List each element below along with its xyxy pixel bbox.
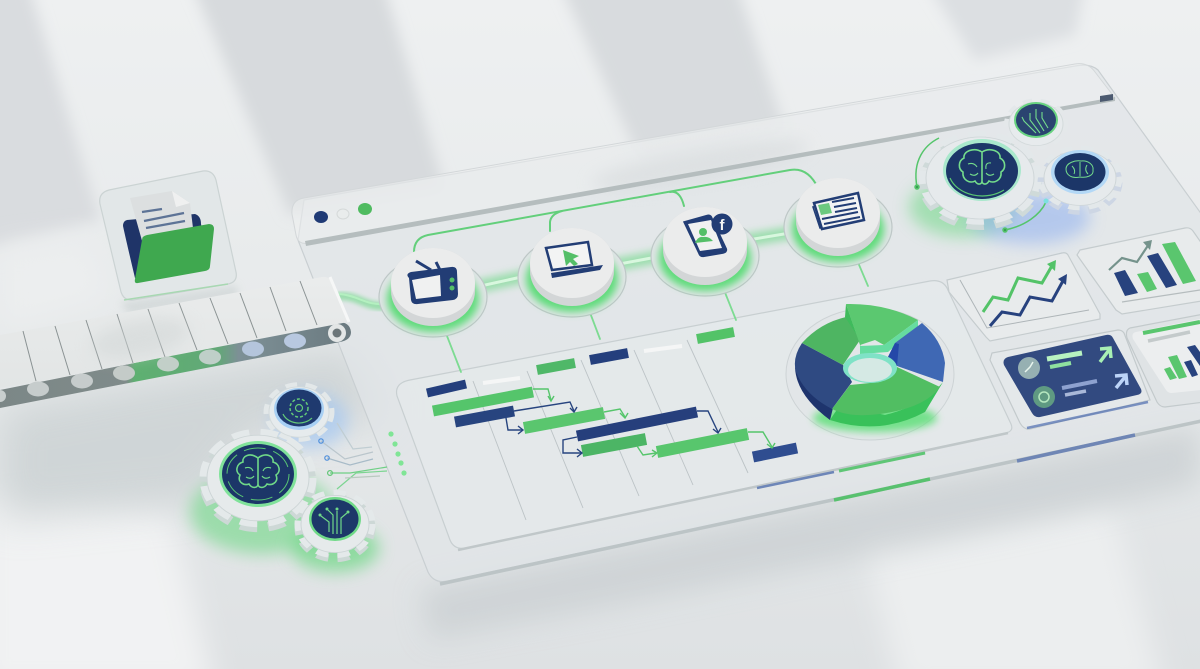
gear: right small	[1042, 149, 1118, 211]
orbit arrows	[915, 138, 1048, 232]
gears: upper right AI cluster	[909, 102, 1118, 244]
pie slice: bottom green	[832, 367, 940, 415]
gear: top small	[268, 386, 330, 438]
node: newspaper channel	[784, 178, 892, 267]
glowing pins	[388, 431, 407, 476]
gantt column lines	[473, 340, 748, 520]
browser title bar	[292, 64, 1115, 246]
window dots	[314, 203, 372, 223]
gear: large brain	[205, 433, 311, 528]
panel: main glass dashboard	[292, 64, 1200, 584]
belt underside	[0, 322, 351, 408]
node: mobile social channel	[651, 207, 759, 296]
icon: phone with social bubble: f	[720, 217, 726, 234]
pie slice: navy	[795, 343, 852, 409]
pie slice: blue	[888, 323, 945, 382]
icon: television	[407, 261, 458, 304]
circuit traces: gears to panel	[319, 423, 407, 489]
icon: open folder	[123, 191, 214, 283]
disc: brain large	[943, 139, 1021, 201]
chart: bars with trend arrow	[1109, 240, 1196, 296]
panel: bar chart card	[1077, 228, 1200, 314]
chart: mini bars	[1164, 345, 1200, 380]
icon: laptop with cursor	[546, 242, 603, 278]
belt rollers	[0, 334, 306, 402]
gear: large brain	[924, 135, 1036, 226]
disc: brain small	[1051, 150, 1109, 194]
panel: mini report card	[1126, 311, 1200, 407]
folder card	[100, 171, 236, 300]
conveyor belt	[0, 277, 351, 408]
disc: circuit	[309, 497, 361, 541]
disc: circuit	[1014, 102, 1058, 138]
panel: dark KPI card	[990, 330, 1150, 429]
chart: gantt timeline	[427, 332, 797, 520]
pie centre hub	[843, 353, 897, 383]
gear: top small	[1008, 102, 1064, 146]
panel rim with coloured reflections	[440, 417, 1200, 584]
gears: lower left AI cluster	[190, 386, 379, 572]
pie slice: green top left	[802, 317, 860, 365]
icon: newspaper	[813, 193, 864, 229]
connector lines: green data paths	[340, 170, 868, 372]
pie slice: raised light green	[845, 304, 918, 354]
panel: gantt and pie glass card	[397, 281, 1012, 550]
KPI contents	[1018, 348, 1127, 408]
gear: bottom small	[299, 494, 371, 558]
gantt bars	[427, 332, 797, 457]
belt pulley	[328, 324, 346, 342]
chart: line trends	[983, 260, 1067, 326]
conveyor and panel cast shadows	[0, 285, 1200, 640]
belt slats	[0, 277, 349, 388]
disc: settings	[274, 388, 324, 430]
disc: brain large	[219, 441, 297, 507]
gantt dependency arrows	[506, 389, 775, 457]
panel: rising lines card	[947, 253, 1100, 341]
chart: 3D donut pie	[786, 304, 954, 440]
node: laptop channel	[518, 228, 626, 317]
node: TV channel	[379, 248, 487, 337]
